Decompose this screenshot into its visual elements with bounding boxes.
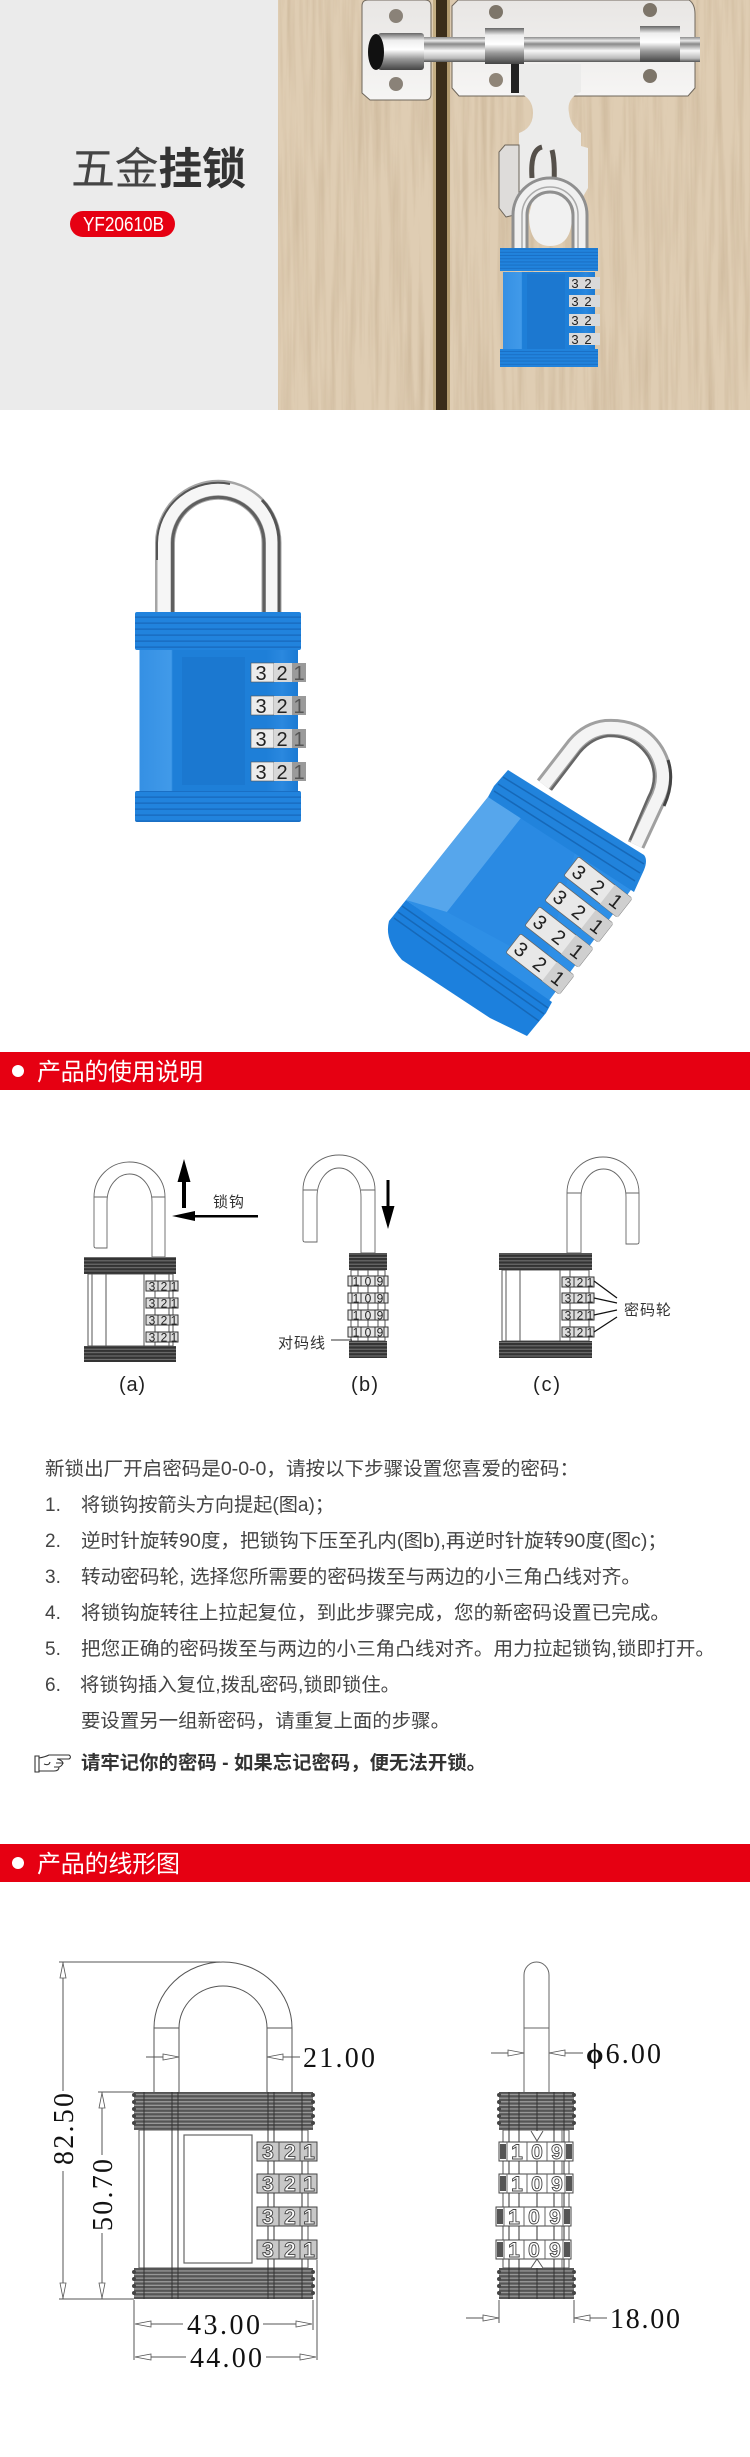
dials: 1 [587, 1326, 594, 1340]
intro line: 新锁出厂开启密码是0-0-0，请按以下步骤设置您喜爱的密码： [45, 1458, 579, 1480]
dials: 2 [284, 2141, 296, 2164]
combination dials: 2 [586, 876, 609, 900]
dials [257, 2141, 317, 2262]
label: shackle: 锁钩 [213, 1194, 244, 1211]
dials: 2 [577, 1276, 584, 1290]
shackle [303, 1155, 375, 1253]
dimension 82.50: 82.50 [49, 2093, 80, 2165]
dials: 9 [549, 2206, 561, 2229]
dials: 3 [565, 1292, 572, 1306]
dials: 2 [284, 2239, 296, 2262]
section bar: usage: 产品的使用说明 [37, 1059, 203, 1086]
combination dials: 1 [293, 663, 305, 685]
dials: 3 [262, 2206, 274, 2229]
dials: 1 [511, 2141, 523, 2164]
dimension diameter 6.00 [491, 2039, 661, 2070]
dials: 1 [508, 2206, 520, 2229]
inset panel [447, 818, 575, 965]
dials: 3 [565, 1276, 572, 1290]
dimension 44.00: 44.00 [190, 2343, 262, 2374]
dials: 1 [303, 2173, 315, 2196]
arrow: left [172, 1211, 258, 1221]
dials: 1 [303, 2239, 315, 2262]
lock body [84, 1257, 176, 1362]
dimension 50.70 [88, 2092, 134, 2299]
line drawing: front view [49, 1962, 375, 2374]
combination dials: 3 [255, 696, 267, 718]
dials: 3 [262, 2173, 274, 2196]
step 1: 1. [45, 1495, 61, 1516]
dials [562, 1276, 594, 1340]
dials: 3 [149, 1314, 156, 1328]
combination dials: 2 [547, 926, 570, 950]
dials: 1 [171, 1314, 178, 1328]
step 1: 将锁钩按箭头方向提起(图a)； [81, 1494, 334, 1516]
shackle [157, 483, 279, 612]
combination dials: 3 [571, 276, 579, 291]
wood door background [278, 0, 750, 410]
combination dials: 3 [255, 729, 267, 751]
label: alignment line: 对码线 [278, 1335, 325, 1352]
combination dials: 1 [585, 915, 608, 939]
icon: pointing hand [35, 1755, 70, 1772]
warning: 请牢记你的密码 - 如果忘记密码，便无法开锁。 [81, 1751, 486, 1774]
dimension 18.00 [466, 2300, 680, 2335]
combination dials: 1 [546, 967, 569, 991]
combination dials [569, 276, 600, 347]
dials: 0 [531, 2173, 543, 2196]
dials: 3 [149, 1296, 156, 1310]
combination dials: 3 [571, 294, 579, 309]
combination dials: 2 [276, 663, 288, 685]
dials: 3 [565, 1326, 572, 1340]
dials: 2 [577, 1292, 584, 1306]
shackle [154, 1962, 292, 2092]
dials: 0 [531, 2141, 543, 2164]
dials: 0 [365, 1292, 372, 1306]
diagram c [499, 1157, 671, 1396]
dimension diameter 6.00: ϕ6.00 [586, 2039, 661, 2070]
dials: 3 [149, 1280, 156, 1294]
model badge: YF20610B [83, 214, 164, 236]
shackle [567, 1157, 639, 1253]
diagram a [84, 1159, 258, 1396]
arrow: down [382, 1180, 394, 1229]
combination dials: 2 [276, 696, 288, 718]
dials: 1 [353, 1308, 360, 1322]
dials: 2 [577, 1308, 584, 1322]
dials: 2 [284, 2173, 296, 2196]
dimension 50.70: 50.70 [88, 2159, 119, 2231]
dials: 3 [262, 2239, 274, 2262]
dials: 3 [565, 1308, 572, 1322]
dimension 18.00: 18.00 [610, 2304, 680, 2335]
padlock photo: front view [135, 483, 306, 822]
combination dials: 2 [584, 313, 592, 328]
shackle [94, 1162, 165, 1257]
dials: 0 [365, 1326, 372, 1340]
dials: 9 [551, 2141, 563, 2164]
combination dials: 1 [565, 940, 588, 964]
combination dials: 1 [293, 696, 305, 718]
dials: 1 [353, 1326, 360, 1340]
dials: 1 [171, 1330, 178, 1344]
combination dials: 2 [584, 332, 592, 347]
caption a: (a) [119, 1374, 145, 1396]
dimension 21.00: 21.00 [303, 2043, 375, 2074]
lock body [406, 797, 636, 1002]
step 2: 逆时针旋转90度，把锁钩下压至孔内(图b),再逆时针旋转90度(图c)； [81, 1530, 667, 1552]
dials: 2 [577, 1326, 584, 1340]
lock body side [499, 2092, 574, 2299]
combination dials: 3 [571, 313, 579, 328]
bottom ribs [135, 791, 301, 822]
dials: 1 [353, 1274, 360, 1288]
arrow: up [178, 1159, 190, 1208]
instructions text [35, 1458, 715, 1774]
dials: 1 [353, 1292, 360, 1306]
dials: 1 [303, 2206, 315, 2229]
caption b: (b) [351, 1374, 378, 1396]
dials: 1 [508, 2239, 520, 2262]
dials: 9 [377, 1274, 384, 1288]
combination dials: 2 [584, 276, 592, 291]
top ribs [488, 770, 646, 892]
hero grey background [0, 0, 278, 410]
step 2: 2. [45, 1531, 61, 1552]
dials: 1 [511, 2173, 523, 2196]
step 6: 将锁钩插入复位,拨乱密码,锁即锁住。 [80, 1674, 400, 1696]
shackle [544, 728, 671, 845]
dials: 3 [262, 2141, 274, 2164]
dials: 2 [161, 1330, 168, 1344]
diagram b [278, 1155, 394, 1396]
section bar: usage [0, 1052, 750, 1090]
combination dials: 2 [276, 729, 288, 751]
combination dials: 3 [567, 861, 590, 885]
line drawing: side view [466, 1962, 680, 2335]
step 5: 5. [45, 1639, 61, 1660]
dials: 9 [551, 2173, 563, 2196]
inset panel [182, 657, 245, 785]
dials: 0 [365, 1308, 372, 1322]
dials: 2 [161, 1314, 168, 1328]
dials: 2 [161, 1280, 168, 1294]
section bar: line drawing [0, 1844, 750, 1882]
label: dials: 密码轮 [624, 1302, 671, 1319]
dials [496, 2141, 573, 2262]
shackle [524, 1962, 549, 2092]
lock body [140, 650, 298, 791]
label: alignment line [278, 1335, 352, 1352]
combination dials: 3 [255, 663, 267, 685]
dials: 1 [171, 1280, 178, 1294]
combination dials [506, 857, 632, 994]
combination dials: 1 [293, 729, 305, 751]
dimension 82.50 [49, 1962, 220, 2299]
step 3: 转动密码轮, 选择您所需要的密码拨至与两边的小三角凸线对齐。 [81, 1566, 641, 1588]
combination dials: 2 [567, 901, 590, 925]
title: 五金挂锁 [71, 145, 246, 194]
top ribs [135, 612, 301, 650]
combination dials: 2 [528, 953, 551, 977]
dials: 9 [377, 1308, 384, 1322]
dials: 1 [303, 2141, 315, 2164]
combination dials: 1 [604, 890, 627, 914]
dials: 9 [377, 1292, 384, 1306]
combination dials: 3 [548, 886, 571, 910]
combination dials: 2 [584, 294, 592, 309]
dials: 0 [365, 1274, 372, 1288]
bottom ribs [388, 900, 552, 1036]
step 4: 4. [45, 1603, 61, 1624]
lock body side [349, 1253, 387, 1358]
dials [146, 1280, 178, 1344]
padlock photo: angled view [388, 728, 671, 1036]
combination dials: 3 [509, 938, 532, 962]
dimension 44.00 [135, 2260, 317, 2374]
lock body [134, 2092, 313, 2299]
lock body [499, 1253, 592, 1358]
icon: padlock on door [500, 184, 600, 367]
step 3: 3. [45, 1567, 61, 1588]
dimension 43.00 [134, 2300, 313, 2360]
dimension 21.00 [146, 2043, 375, 2074]
callout lines [594, 1281, 617, 1332]
dials: 2 [284, 2206, 296, 2229]
repeat note: 要设置另一组新密码，请重复上面的步骤。 [81, 1710, 450, 1732]
step 4: 将锁钩旋转往上拉起复位，到此步骤完成，您的新密码设置已完成。 [81, 1602, 670, 1624]
dials: 0 [528, 2206, 540, 2229]
dials [348, 1274, 388, 1340]
combination dials: 1 [293, 762, 305, 784]
panel: hero [0, 0, 750, 410]
dials: 2 [161, 1296, 168, 1310]
dials: 9 [549, 2239, 561, 2262]
step 5: 把您正确的密码拨至与两边的小三角凸线对齐。用力拉起锁钩,锁即打开。 [81, 1638, 715, 1660]
combination dials: 3 [571, 332, 579, 347]
door latch hardware [362, 0, 700, 217]
combination dials: 3 [255, 762, 267, 784]
combination dials [251, 663, 306, 784]
combination dials: 2 [276, 762, 288, 784]
dials: 1 [587, 1292, 594, 1306]
dials: 3 [149, 1330, 156, 1344]
dials: 1 [587, 1276, 594, 1290]
dimension 43.00: 43.00 [187, 2310, 260, 2341]
dials: 1 [587, 1308, 594, 1322]
bright strip [406, 797, 521, 912]
dials: 1 [171, 1296, 178, 1310]
caption c: (c) [533, 1374, 560, 1396]
dials: 9 [377, 1326, 384, 1340]
section bar: line drawing: 产品的线形图 [37, 1851, 180, 1878]
step 6: 6. [45, 1675, 61, 1696]
dials: 0 [528, 2239, 540, 2262]
combination dials: 3 [528, 911, 551, 935]
